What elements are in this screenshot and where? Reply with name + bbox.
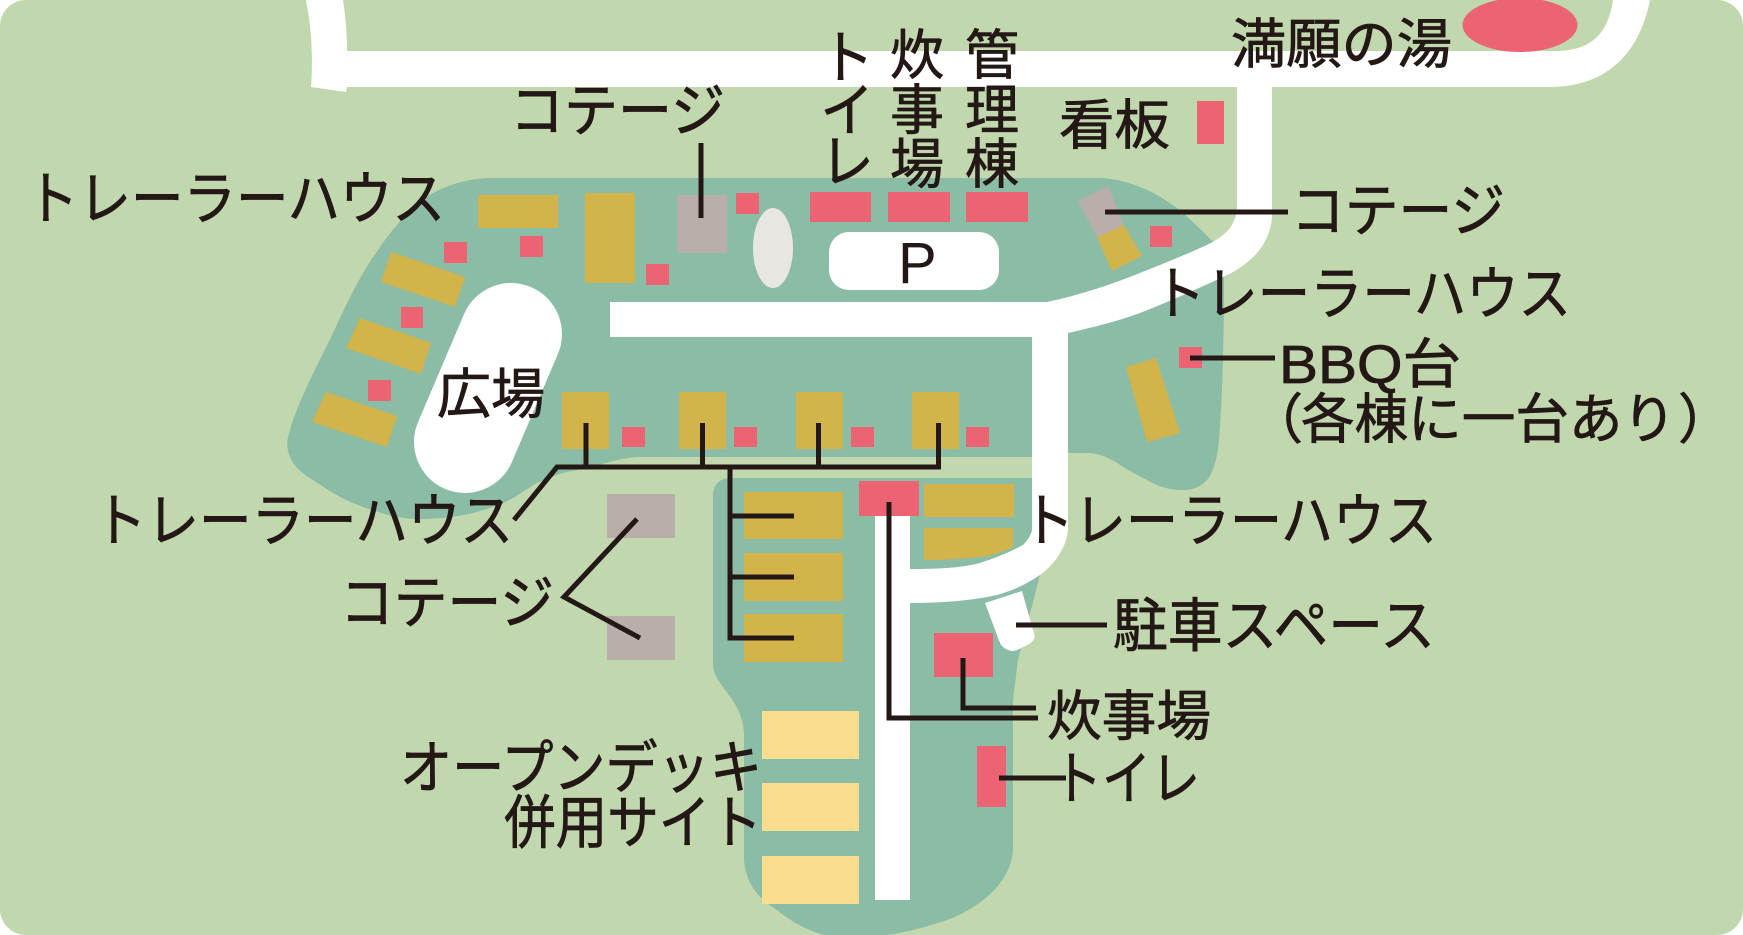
plaza	[465, 334, 511, 442]
label: office, vertical: 管	[965, 26, 1019, 86]
label: trailer house, lower right: トレーラーハウス	[1022, 489, 1437, 554]
label: trailer house, lower left: トレーラーハウス	[94, 489, 513, 554]
label: parking mark: P	[898, 231, 937, 296]
label: trailer house, upper left: トレーラーハウス	[26, 167, 445, 232]
label: plaza: 広場	[437, 365, 545, 425]
road: south branch	[910, 330, 1068, 603]
trailer houses	[312, 193, 1180, 662]
label: cooking area, lower: 炊事場	[1047, 687, 1211, 747]
label: BBQ stand: BBQ台	[1279, 335, 1461, 395]
road: top	[306, 0, 1650, 92]
parking stub	[985, 591, 1035, 651]
label: toilet, vertical: イ	[820, 79, 874, 143]
label: one per building note: 各棟に一台あり	[1301, 390, 1676, 450]
road: connector and middle	[610, 87, 1272, 337]
oval feature	[753, 208, 793, 288]
label: office, vertical: 理	[965, 81, 1019, 141]
lower campsite area	[713, 478, 1040, 935]
hot spring	[1462, 0, 1578, 52]
label: parking space: 駐車スペース	[1113, 594, 1435, 659]
roads	[306, 0, 1650, 900]
label: cooking area, vertical: 事	[890, 81, 944, 141]
label: cooking area, vertical: 場	[890, 135, 944, 195]
label: toilet, vertical: ト	[820, 26, 874, 90]
cottages	[607, 186, 1124, 660]
label: toilet, lower: トイレ	[1053, 747, 1200, 812]
open deck sites	[762, 711, 859, 904]
label: one per building note: （	[1249, 390, 1303, 450]
label: cottage, top: コテージ	[510, 79, 725, 144]
leader lines	[514, 143, 1288, 778]
label: trailer house, right: トレーラーハウス	[1153, 262, 1571, 327]
upper campsite area	[287, 178, 1224, 519]
label: one per building note: ）	[1678, 390, 1732, 450]
parking lot	[829, 232, 999, 290]
label: cooking area, vertical: 炊	[890, 26, 944, 86]
label: open deck: オープンデッキ	[400, 736, 762, 801]
label: signboard: 看板	[1059, 96, 1170, 156]
label: hot spring: 満願の湯	[1231, 15, 1452, 75]
label: toilet, vertical: レ	[820, 130, 874, 194]
label: cottage, lower left: コテージ	[340, 571, 554, 636]
label: office, vertical: 棟	[965, 135, 1019, 195]
label: cottage, right: コテージ	[1291, 179, 1505, 244]
facilities and BBQ stands	[368, 101, 1224, 807]
road: south vertical	[875, 516, 910, 900]
label: combined use site: 併用サイト	[504, 791, 762, 856]
